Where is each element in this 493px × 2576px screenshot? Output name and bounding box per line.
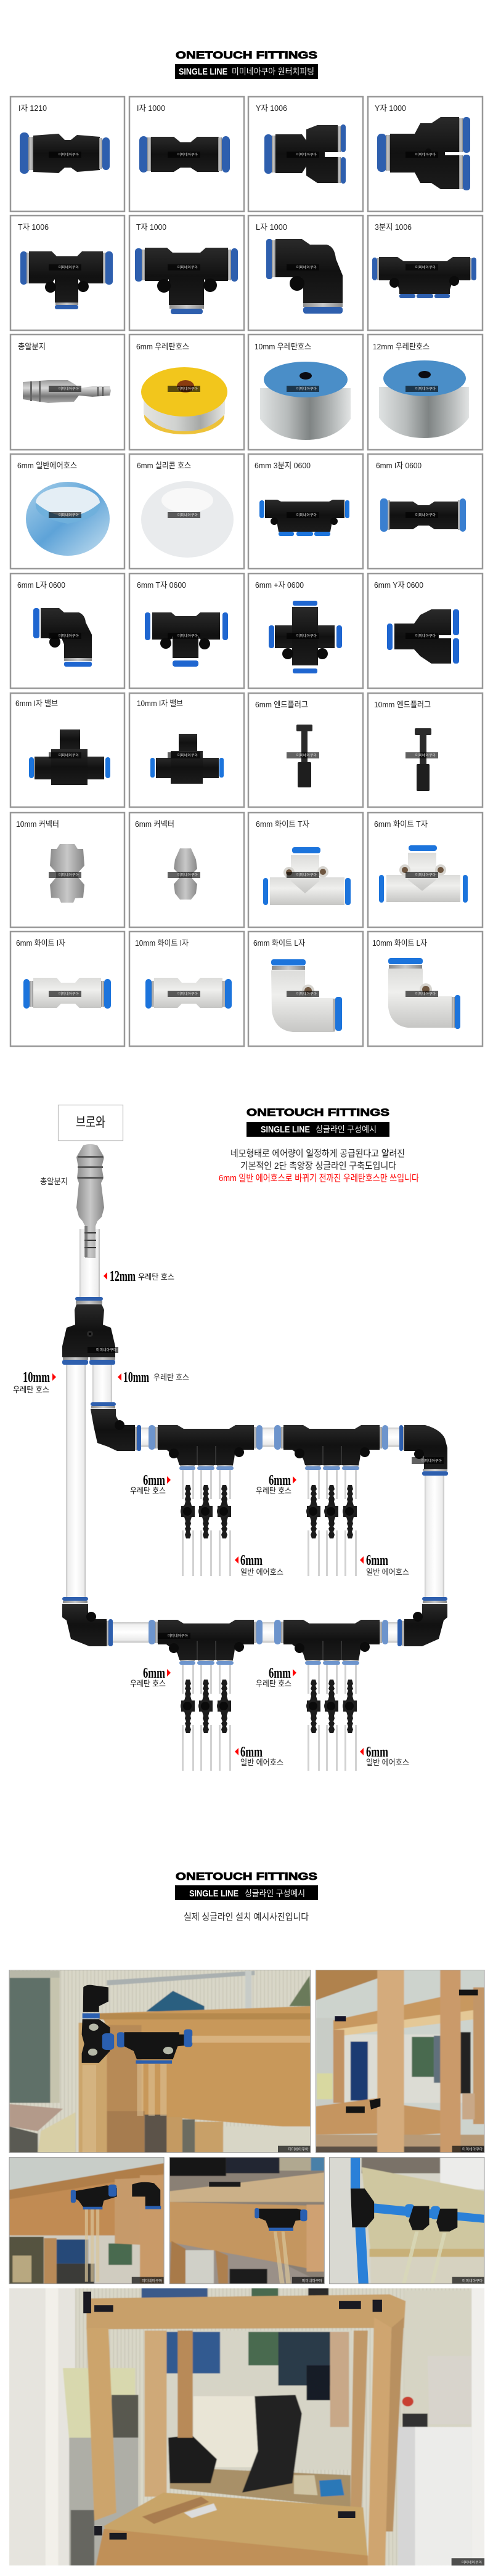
description text: 실제 싱글라인 설치 예시사진입니다	[184, 1912, 309, 1922]
photo: full wooden rack	[9, 2288, 484, 2566]
panel: 6mm 커넥터: 미미네아쿠아	[177, 872, 198, 877]
label: 6mm air hose top 2	[360, 1553, 409, 1577]
panel: 6mm 3분지 0600: 6mm 3분지 0600	[255, 461, 311, 470]
panel: I자 1000: I자 1000	[137, 104, 165, 113]
panel: 6mm 화이트 I자: 6mm 화이트 I자	[16, 938, 65, 948]
panel: 12mm 우레탄호스: 미미네아쿠아	[415, 386, 436, 391]
panel: 6mm 화이트 L자: 미미네아쿠아	[296, 991, 317, 996]
photo: tall wooden frame	[316, 1970, 484, 2153]
panel: I자 1210: I자 1210	[18, 104, 47, 113]
icon: Y fitting: 미미네아쿠아	[96, 1347, 116, 1352]
panel: T자 1000	[129, 216, 244, 330]
panel: product grid	[10, 97, 483, 1046]
panel: 6mm 일반에어호스: 6mm 일반에어호스	[17, 461, 77, 470]
panel: I자 1000: 미미네아쿠아	[177, 152, 198, 157]
panel: 6mm I자 밸브: 미미네아쿠아	[59, 753, 79, 758]
panel: 6mm 우레탄호스: 미미네아쿠아	[177, 386, 198, 391]
panel: 6mm 화이트 L자	[248, 932, 363, 1046]
label: 6mm urethane bottom 2	[256, 1665, 296, 1688]
label: 12mm	[104, 1269, 174, 1285]
panel: 10mm 엔드플러그: 미미네아쿠아	[415, 753, 436, 758]
label: 10mm right: 10mm	[123, 1370, 149, 1386]
panel: T자 1006: T자 1006	[18, 222, 49, 232]
photo: full wooden rack: 미미네아쿠아	[462, 2559, 482, 2565]
panel: L자 1000: L자 1000	[256, 222, 287, 232]
panel: I자 1210: 미미네아쿠아	[59, 152, 79, 157]
panel: 6mm 3분지 0600: 미미네아쿠아	[296, 513, 317, 518]
label: 10mm right: 우레탄 호스	[153, 1373, 189, 1382]
panel: 6mm 일반에어호스: 미미네아쿠아	[59, 513, 79, 518]
panel: 6mm T자 0600: 6mm T자 0600	[137, 580, 186, 590]
label: 6mm urethane top 2: 우레탄 호스	[256, 1486, 291, 1495]
panel: I자 1210	[10, 97, 124, 211]
subtitle bar: 싱글라인 구성예시	[316, 1124, 377, 1134]
panel: 6mm I자 밸브: 6mm I자 밸브	[15, 699, 58, 708]
panel: 10mm 우레탄호스	[248, 335, 363, 450]
panel: 6mm 실리콘 호스	[129, 454, 244, 569]
label: 6mm urethane bottom 1	[130, 1665, 171, 1688]
label: 6mm air hose top 2: 6mm	[366, 1553, 388, 1569]
panel: 6mm 커넥터: 6mm 커넥터	[135, 819, 174, 829]
panel: T자 1006: 미미네아쿠아	[59, 265, 79, 270]
panel: 6mm 화이트 T자 (1)	[248, 813, 363, 927]
panel: 총알분지	[10, 335, 124, 450]
panel: 10mm 커넥터: 10mm 커넥터	[16, 819, 59, 829]
panel: 6mm Y자 0600: 미미네아쿠아	[415, 633, 436, 638]
subtitle bar	[175, 1885, 318, 1900]
panel: 6mm 엔드플러그: 미미네아쿠아	[296, 753, 317, 758]
panel: 6mm 화이트 I자	[10, 932, 124, 1046]
label: 6mm air hose top 1	[235, 1553, 283, 1577]
panel: 10mm 화이트 L자: 10mm 화이트 L자	[372, 938, 427, 948]
panel: 6mm 실리콘 호스: 6mm 실리콘 호스	[137, 461, 191, 470]
panel: 6mm 화이트 T자 (1): 6mm 화이트 T자	[256, 819, 309, 829]
panel: 6mm I자 0600: 6mm I자 0600	[376, 461, 422, 470]
icon: manifold top 1	[149, 1425, 263, 1470]
panel: L자 1000: 미미네아쿠아	[296, 265, 317, 270]
title: ONETOUCH FITTINGS	[176, 49, 317, 61]
icon: L fitting top right: 미미네아쿠아	[422, 1458, 442, 1463]
panel: 6mm +자 0600	[248, 574, 363, 688]
label: 6mm urethane bottom 1: 6mm	[143, 1665, 165, 1681]
label: 10mm left	[13, 1370, 56, 1394]
panel: T자 1006	[10, 216, 124, 330]
panel: 6mm +자 0600: 미미네아쿠아	[296, 633, 317, 638]
blower box: 브로와	[76, 1115, 105, 1130]
label: 10mm left: 10mm	[23, 1370, 50, 1386]
panel: 10mm I자 밸브: 10mm I자 밸브	[137, 699, 183, 708]
icon: manifold top 2	[274, 1425, 388, 1470]
panel: 6mm 화이트 T자 (1): 미미네아쿠아	[296, 872, 317, 877]
panel: 10mm I자 밸브	[129, 693, 244, 807]
label: 6mm urethane top 1: 우레탄 호스	[130, 1486, 166, 1495]
panel: 총알분지: 총알분지	[18, 342, 46, 351]
panel: 6mm 우레탄호스	[129, 335, 244, 450]
panel: 6mm I자 밸브	[10, 693, 124, 807]
blower box	[58, 1105, 123, 1141]
panel: 6mm L자 0600: 6mm L자 0600	[17, 580, 65, 590]
panel: 6mm Y자 0600: 6mm Y자 0600	[374, 580, 423, 590]
panel: 6mm 일반에어호스	[10, 454, 124, 569]
label: 6mm urethane bottom 2: 우레탄 호스	[256, 1679, 291, 1688]
panel: L자 1000	[248, 216, 363, 330]
watermark on manifold: 미미네아쿠아	[168, 1633, 188, 1638]
icon: Y fitting	[62, 1297, 118, 1365]
description text	[219, 1148, 419, 1184]
photo: blue tube installation: 미미네아쿠아	[462, 2278, 483, 2283]
label: 12mm: 우레탄 호스	[138, 1272, 174, 1282]
panel: 10mm 커넥터: 미미네아쿠아	[59, 872, 79, 877]
photo: elbow and manifold on wooden frame	[9, 1970, 311, 2153]
panel: 6mm +자 0600: 6mm +자 0600	[255, 580, 304, 590]
label: 6mm air hose bottom 2: 6mm	[366, 1744, 388, 1760]
panel: 6mm 화이트 I자: 미미네아쿠아	[59, 991, 79, 996]
panel: 3분지 1006	[368, 216, 483, 330]
label: 6mm urethane top 2	[256, 1473, 296, 1495]
panel: Y자 1000: 미미네아쿠아	[415, 152, 436, 157]
section 2 header	[219, 1107, 419, 1184]
label: 6mm air hose bottom 2	[360, 1744, 409, 1767]
panel: Y자 1000: Y자 1000	[375, 104, 406, 113]
panel: 6mm 화이트 L자: 6mm 화이트 L자	[253, 938, 305, 948]
title: ONETOUCH FITTINGS	[246, 1107, 389, 1118]
label: 6mm air hose bottom 2: 일반 에어호스	[366, 1758, 409, 1767]
panel: 10mm 화이트 I자: 10mm 화이트 I자	[135, 938, 189, 948]
label: 10mm left: 우레탄 호스	[13, 1385, 49, 1394]
subtitle bar: SINGLE LINE	[179, 67, 227, 77]
icon: branch hoses and valves bottom 2	[306, 1665, 357, 1771]
description text: 6mm 일반 에어호스로 바뀌기 전까진 우레탄호스만 쓰입니다	[219, 1173, 419, 1184]
panel: 6mm T자 0600: 미미네아쿠아	[177, 633, 198, 638]
label: 10mm right	[118, 1370, 189, 1386]
panel: T자 1000: T자 1000	[136, 222, 166, 232]
title: ONETOUCH FITTINGS	[176, 1871, 317, 1882]
panel: Y자 1006: 미미네아쿠아	[296, 152, 317, 157]
panel: 6mm 화이트 T자 (2)	[368, 813, 483, 927]
label: 6mm air hose bottom 1: 6mm	[240, 1744, 263, 1760]
panel: 3분지 1006: 3분지 1006	[375, 222, 412, 232]
hose: 12mm	[79, 1229, 100, 1298]
panel: I자 1000	[129, 97, 244, 211]
panel: 10mm 엔드플러그	[368, 693, 483, 807]
section 3 header	[175, 1871, 318, 1922]
subtitle bar: SINGLE LINE	[261, 1124, 310, 1135]
icon: barb fitting	[76, 1144, 104, 1258]
label: 6mm urethane top 1: 6mm	[143, 1473, 165, 1489]
label: 6mm air hose top 1: 일반 에어호스	[240, 1567, 283, 1577]
panel: 10mm 화이트 I자	[129, 932, 244, 1046]
panel: 6mm L자 0600	[10, 574, 124, 688]
panel: 6mm 커넥터	[129, 813, 244, 927]
photo: manifold and elbow close-up	[9, 2157, 164, 2284]
panel: 10mm 화이트 I자: 미미네아쿠아	[177, 991, 198, 996]
panel: 6mm 엔드플러그: 6mm 엔드플러그	[255, 700, 308, 709]
icon: manifold bottom 1	[149, 1620, 263, 1665]
description text: 네모형태로 에어량이 일정하게 공급된다고 알려진	[230, 1148, 405, 1159]
label: 6mm urethane top 1	[130, 1473, 171, 1495]
photo: tall wooden frame: 미미네아쿠아	[462, 2147, 483, 2151]
panel: 12mm 우레탄호스	[368, 335, 483, 450]
panel: 10mm 우레탄호스: 미미네아쿠아	[296, 386, 317, 391]
label: 6mm air hose bottom 1	[235, 1744, 283, 1767]
panel: piping diagram	[13, 1105, 448, 1771]
panel: 6mm I자 0600: 미미네아쿠아	[415, 513, 436, 518]
label: 6mm air hose top 2: 일반 에어호스	[366, 1567, 409, 1577]
panel: 10mm 화이트 L자	[368, 932, 483, 1046]
label: 12mm: 12mm	[110, 1269, 136, 1285]
photo: manifold and elbow close-up: 미미네아쿠아	[142, 2278, 162, 2283]
panel: Y자 1006	[248, 97, 363, 211]
subtitle bar: SINGLE LINE	[189, 1888, 238, 1899]
panel: 3분지 1006: 미미네아쿠아	[415, 265, 436, 270]
panel: 6mm 실리콘 호스: 미미네아쿠아	[177, 513, 198, 518]
panel: 6mm I자 0600	[368, 454, 483, 569]
panel: 6mm L자 0600: 미미네아쿠아	[59, 633, 79, 638]
panel: 10mm 화이트 L자: 미미네아쿠아	[415, 991, 436, 996]
panel: 10mm I자 밸브: 미미네아쿠아	[177, 753, 198, 758]
hoses: vertical and horizontal	[66, 1365, 444, 1643]
label: 6mm urethane bottom 2: 6mm	[269, 1665, 291, 1681]
section 1 header	[175, 49, 318, 79]
panel: 12mm 우레탄호스: 12mm 우레탄호스	[373, 342, 430, 351]
icon: branch hoses and valves bottom 1	[181, 1665, 231, 1771]
panel: 10mm 우레탄호스: 10mm 우레탄호스	[255, 342, 311, 351]
panel: 10mm 엔드플러그: 10mm 엔드플러그	[374, 700, 431, 709]
label: 총알분지: 총알분지	[40, 1177, 68, 1186]
panel: 6mm 우레탄호스: 6mm 우레탄호스	[136, 342, 189, 351]
watermark on manifold	[158, 1633, 190, 1639]
panel: 총알분지: 미미네아쿠아	[59, 386, 79, 391]
panel: 10mm 커넥터	[10, 813, 124, 927]
panel: 6mm 3분지 0600	[248, 454, 363, 569]
subtitle bar: 미미네아쿠아 원터치피팅	[232, 67, 314, 76]
subtitle bar: 싱글라인 구성예시	[245, 1888, 305, 1898]
photo: manifold below plywood shelf: 미미네아쿠아	[302, 2278, 322, 2283]
panel: 6mm Y자 0600	[368, 574, 483, 688]
icon: L fitting bottom right	[397, 1597, 447, 1646]
label: 6mm urethane top 2: 6mm	[269, 1473, 291, 1489]
panel: 6mm 화이트 T자 (2): 6mm 화이트 T자	[374, 819, 428, 829]
label: 6mm urethane bottom 1: 우레탄 호스	[130, 1679, 166, 1688]
icon: L fitting bottom left	[62, 1597, 113, 1646]
panel: Y자 1006: Y자 1006	[256, 104, 287, 113]
subtitle bar	[175, 64, 318, 79]
icon: L fitting top left	[91, 1402, 141, 1451]
panel: 6mm 화이트 T자 (2): 미미네아쿠아	[415, 872, 436, 877]
photo: blue tube installation	[329, 2157, 484, 2284]
panel: 6mm 엔드플러그	[248, 693, 363, 807]
icon: manifold bottom 2	[274, 1620, 388, 1665]
label: 6mm air hose bottom 1: 일반 에어호스	[240, 1758, 283, 1767]
photo: manifold below plywood shelf	[169, 2157, 325, 2284]
panel: 6mm T자 0600	[129, 574, 244, 688]
description text: 기본적인 2단 촉앙장 싱글라인 구축도입니다	[240, 1161, 396, 1171]
panel: Y자 1000	[368, 97, 483, 211]
label: 6mm air hose top 1: 6mm	[240, 1553, 263, 1569]
icon: branch hoses and valves top 2	[306, 1470, 357, 1576]
panel: T자 1000: 미미네아쿠아	[177, 265, 198, 270]
icon: L fitting top right	[399, 1425, 448, 1476]
subtitle bar	[246, 1122, 389, 1137]
icon: branch hoses and valves top 1	[181, 1470, 231, 1576]
photo: elbow and manifold on wooden frame: 미미네아쿠아	[288, 2147, 309, 2151]
